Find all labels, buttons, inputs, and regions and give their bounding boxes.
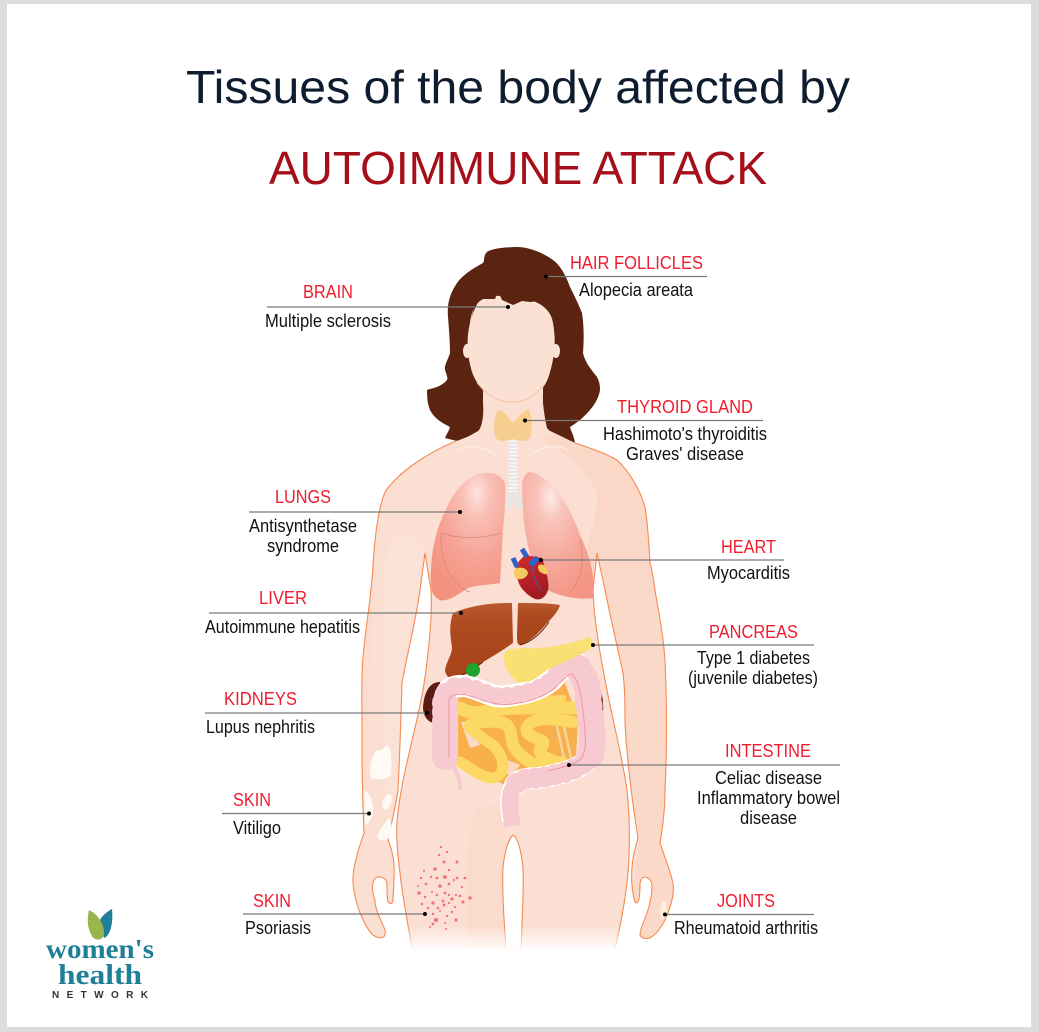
- callout: lungs: syndrome: [267, 536, 339, 556]
- callout: lungs: Antisynthetase: [249, 516, 357, 536]
- body silhouette: [352, 388, 674, 950]
- callout: heart: Myocarditis: [707, 563, 790, 583]
- callout: skin vitiligo: [222, 790, 371, 838]
- colon white edge: [445, 664, 592, 785]
- callout: pancreas: Type 1 diabetes: [697, 648, 810, 668]
- kidneys: [423, 679, 603, 723]
- callout: kidneys: Lupus nephritis: [206, 717, 315, 737]
- title: [186, 61, 850, 194]
- title: Tissues of the body affected by: [186, 61, 850, 113]
- callout: thyroid gland: Graves' disease: [626, 444, 744, 464]
- leg gap: [503, 835, 523, 950]
- callout: skin psoriasis: SKIN: [253, 891, 291, 911]
- callout: pancreas: (juvenile diabetes): [688, 668, 818, 688]
- callout: thyroid gland: Hashimoto's thyroiditis: [603, 424, 767, 444]
- psoriasis rash: [417, 846, 472, 930]
- callout: joints: Rheumatoid arthritis: [674, 918, 818, 938]
- callout: intestine: [567, 741, 840, 828]
- descending colon: [578, 668, 592, 757]
- callout: liver: LIVER: [259, 588, 307, 608]
- logo: health: [58, 960, 142, 991]
- callout: kidneys: KIDNEYS: [224, 689, 297, 709]
- callout: skin vitiligo: Vitiligo: [233, 818, 281, 838]
- callout: pancreas: [591, 622, 818, 688]
- callout: skin psoriasis: Psoriasis: [245, 918, 311, 938]
- callout: liver: Autoimmune hepatitis: [205, 617, 360, 637]
- ascending colon: [434, 697, 456, 757]
- callout: brain: BRAIN: [303, 282, 353, 302]
- fringe: [470, 275, 560, 325]
- pancreas: [504, 637, 593, 682]
- callout: intestine: INTESTINE: [725, 741, 811, 761]
- callout: skin psoriasis: [243, 891, 427, 938]
- callout: skin vitiligo: SKIN: [233, 790, 271, 810]
- callout: lungs: LUNGS: [275, 487, 331, 507]
- heart: [513, 549, 549, 599]
- lungs: [431, 472, 594, 600]
- callout: lungs: [249, 487, 462, 556]
- callout: hair follicles: [544, 253, 707, 300]
- icon: leaves: [88, 909, 112, 940]
- logo: women's: [46, 934, 154, 964]
- callout: joints: JOINTS: [717, 891, 775, 911]
- body outline: [353, 441, 456, 948]
- face: [468, 296, 555, 402]
- leg fade: [400, 925, 625, 952]
- callout: intestine: Celiac disease: [715, 768, 822, 788]
- callout: pancreas: PANCREAS: [709, 622, 798, 642]
- logo: NETWORK: [52, 990, 149, 1001]
- callout: thyroid gland: [523, 397, 767, 464]
- callout: heart: [539, 537, 790, 583]
- liver: [445, 603, 560, 678]
- callout: intestine: Inflammatory bowel: [697, 788, 840, 808]
- trachea: [505, 437, 523, 508]
- callout: brain: Multiple sclerosis: [265, 311, 391, 331]
- colon centre line: [449, 674, 585, 771]
- transverse colon: [445, 664, 578, 697]
- callout: thyroid gland: THYROID GLAND: [617, 397, 753, 417]
- callout: intestine: disease: [740, 808, 797, 828]
- logo: [46, 909, 154, 1001]
- sigmoid colon: [515, 757, 590, 785]
- callout: heart: HEART: [721, 537, 776, 557]
- vitiligo patches: [364, 746, 392, 841]
- joint bone: [660, 901, 667, 919]
- hair: [427, 247, 600, 443]
- body illustration: [352, 247, 674, 950]
- callout: hair follicles: Alopecia areata: [579, 280, 694, 300]
- rectum: [510, 783, 516, 826]
- thyroid: [494, 409, 532, 441]
- large intestine: [445, 664, 592, 826]
- appendix: [452, 765, 460, 788]
- callout: joints: [663, 891, 818, 938]
- small intestine: [458, 678, 578, 784]
- collar lines: [458, 447, 568, 455]
- callout: hair follicles: HAIR FOLLICLES: [570, 253, 703, 273]
- callout: kidneys: [205, 689, 429, 737]
- callout: brain: [265, 282, 510, 331]
- gallbladder: [466, 663, 480, 677]
- callout: liver: [205, 588, 463, 637]
- title: AUTOIMMUNE ATTACK: [269, 142, 767, 194]
